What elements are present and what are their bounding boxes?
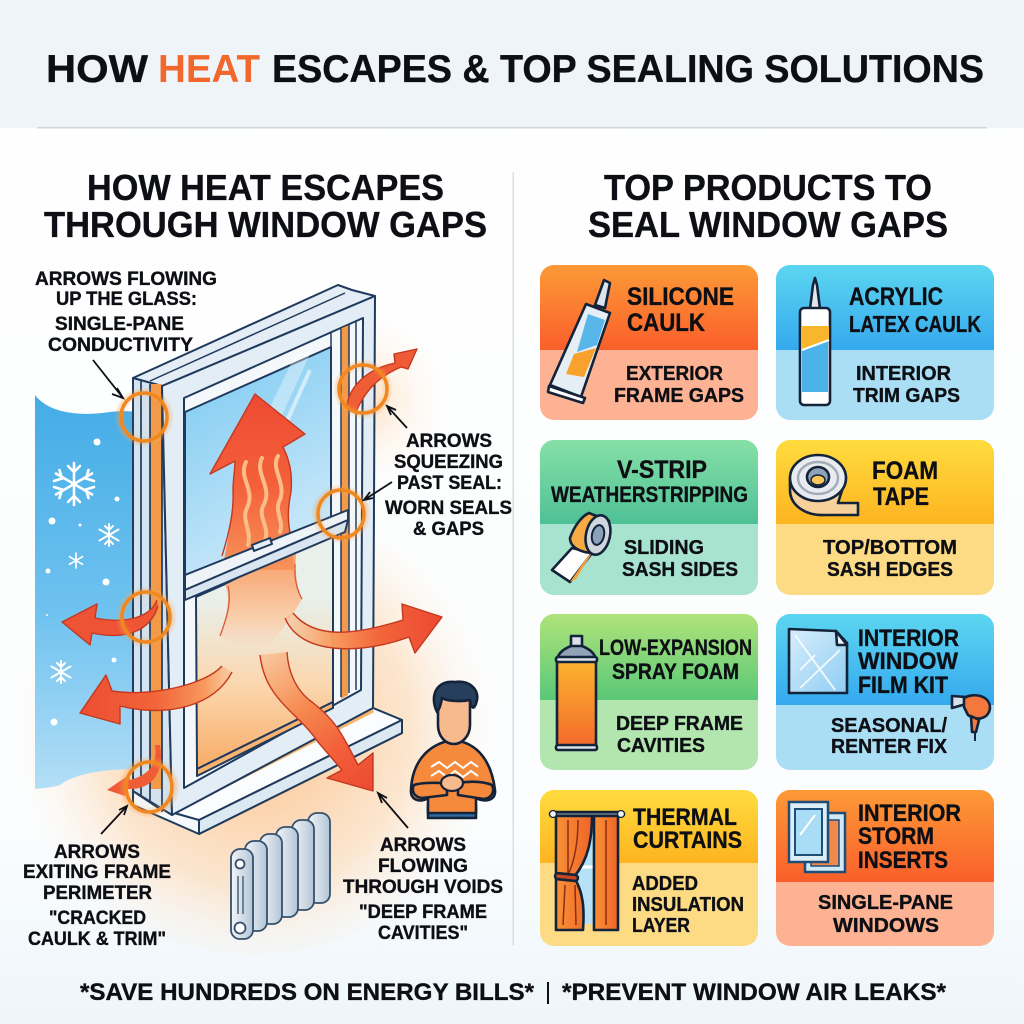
labels: cracked caulk and trim: PERIMETER [43, 883, 152, 904]
right reveal strips [341, 325, 349, 699]
panel: interior window film kit: WINDOW [858, 648, 958, 675]
icon: caulk cartridge [800, 278, 830, 405]
icon: person [411, 682, 495, 818]
pointer arrows [93, 360, 408, 834]
footer tagline [80, 979, 947, 1006]
panel: acrylic latex caulk: LATEX CAULK [849, 311, 981, 337]
footer tagline: *PREVENT WINDOW AIR LEAKS* [562, 979, 947, 1006]
heading: top products: SEAL WINDOW GAPS [588, 204, 948, 245]
title: HEAT [158, 48, 260, 91]
heading: how heat escapes: THROUGH WINDOW GAPS [44, 204, 487, 245]
labels: cracked caulk and trim: "CRACKED [49, 908, 146, 929]
arrow: lower left exit [80, 666, 232, 724]
labels: worn seals and gaps: ARROWS [406, 431, 492, 452]
panel: low-expansion spray foam: LOW-EXPANSION [599, 635, 752, 660]
panel: low-expansion spray foam: DEEP FRAME [616, 713, 743, 735]
panel: v-strip weatherstripping: SLIDING [624, 537, 704, 559]
panel: thermal curtains: LAYER [632, 915, 690, 937]
labels: single-pane conductivity: CONDUCTIVITY [48, 335, 193, 356]
left depth [133, 378, 172, 815]
heading: how heat escapes: HOW HEAT ESCAPES [87, 167, 444, 208]
heading: top products [588, 167, 948, 245]
panel: low-expansion spray foam [540, 614, 758, 770]
panel: acrylic latex caulk [776, 265, 994, 420]
panel: thermal curtains: CURTAINS [633, 827, 742, 854]
labels: cracked caulk and trim: ARROWS [54, 842, 140, 863]
panel: interior window film kit: FILM KIT [858, 672, 948, 699]
labels: cracked caulk and trim: CAULK & TRIM" [28, 929, 166, 950]
icon: radiator [231, 813, 330, 939]
divider [512, 172, 514, 945]
footer tagline: *SAVE HUNDREDS ON ENERGY BILLS* [80, 979, 535, 1006]
icon: hair dryer [952, 695, 990, 741]
title: HOW [46, 48, 148, 91]
leak highlight circles [114, 359, 393, 818]
panel: foam tape: FOAM [872, 457, 938, 485]
icon: plastic film sheet [789, 629, 847, 693]
panel: acrylic latex caulk: TRIM GAPS [853, 385, 960, 407]
heading: how heat escapes [44, 167, 487, 245]
panel: foam tape: SASH EDGES [827, 559, 953, 581]
warm glow [15, 300, 495, 955]
panel: interior storm inserts [776, 790, 994, 946]
meeting rail [185, 510, 348, 600]
panel: silicone caulk: FRAME GAPS [614, 385, 744, 407]
panel: interior storm inserts: STORM [858, 823, 934, 850]
panel: low-expansion spray foam: CAVITIES [617, 735, 705, 757]
panel: acrylic latex caulk: ACRYLIC [849, 283, 943, 311]
labels: deep frame cavities: THROUGH VOIDS [343, 877, 503, 898]
sash lock [252, 538, 272, 551]
arrow: right exit [285, 604, 442, 653]
panel: v-strip weatherstripping: SASH SIDES [622, 559, 738, 581]
panel: interior storm inserts: INSERTS [858, 847, 948, 874]
labels: deep frame cavities: "DEEP FRAME [359, 902, 487, 923]
panel: foam tape: TAPE [873, 483, 929, 511]
panel: interior storm inserts: WINDOWS [833, 915, 939, 937]
top depth [133, 285, 375, 386]
labels: worn seals and gaps: SQUEEZING [394, 452, 503, 473]
labels: deep frame cavities: CAVITIES" [378, 923, 468, 944]
labels: worn seals and gaps: WORN SEALS [385, 498, 512, 519]
panel: interior window film kit: SEASONAL/ [831, 715, 947, 737]
labels: single-pane conductivity: SINGLE-PANE [55, 314, 184, 335]
labels: single-pane conductivity: ARROWS FLOWING [35, 269, 217, 290]
panel: v-strip weatherstripping: V-STRIP [617, 456, 707, 484]
panel: silicone caulk: CAULK [627, 309, 705, 337]
labels: worn seals and gaps: & GAPS [413, 519, 484, 540]
panel: window heat loss diagram [15, 285, 495, 955]
arrow: down through voids [260, 652, 373, 791]
panel: v-strip weatherstripping [540, 440, 758, 595]
arrow: top right exit [347, 349, 417, 412]
icon: caulk tube [548, 280, 610, 403]
panel: interior window film kit: INTERIOR [858, 625, 959, 652]
lower sash glass [196, 536, 333, 769]
panel: v-strip weatherstripping: WEATHERSTRIPPING [551, 482, 748, 507]
icon: spray can [556, 636, 597, 750]
labels: single-pane conductivity [35, 269, 217, 356]
panel: silicone caulk: EXTERIOR [626, 363, 724, 385]
icon: curtains [550, 810, 624, 930]
panel: silicone caulk [540, 265, 758, 420]
panel: acrylic latex caulk: INTERIOR [856, 363, 952, 385]
title: ESCAPES & TOP SEALING SOLUTIONS [272, 48, 984, 91]
panel: interior storm inserts: SINGLE-PANE [818, 892, 953, 914]
panel: foam tape [776, 440, 994, 595]
snowflakes and snow dots [46, 438, 120, 726]
labels: deep frame cavities: FLOWING [378, 856, 468, 877]
panel: thermal curtains [540, 790, 758, 946]
panel: interior window film kit: RENTER FIX [831, 736, 948, 758]
labels: deep frame cavities [343, 835, 503, 944]
heading: top products: TOP PRODUCTS TO [604, 167, 932, 208]
icon: v-strip roll [552, 513, 614, 582]
icon: foam tape roll [790, 455, 858, 515]
arrow: mid left exit [62, 600, 158, 645]
panel: interior window film kit [776, 614, 994, 770]
icon: storm insert frames [789, 802, 845, 872]
panel: thermal curtains: ADDED [632, 873, 698, 895]
labels: worn seals and gaps: PAST SEAL: [397, 473, 502, 494]
cold outdoor panel [35, 395, 150, 789]
panel: silicone caulk: SILICONE [627, 283, 734, 311]
window frame [133, 285, 402, 834]
header band [0, 0, 1024, 128]
labels: cracked caulk and trim [23, 842, 171, 950]
labels: worn seals and gaps [385, 431, 512, 540]
upper sash glass [185, 347, 331, 575]
labels: deep frame cavities: ARROWS [380, 835, 466, 856]
arrow: up the glass [210, 394, 305, 652]
panel: foam tape: TOP/BOTTOM [823, 537, 957, 559]
panel: thermal curtains: INSULATION [632, 894, 744, 916]
panel: interior storm inserts: INTERIOR [858, 800, 961, 827]
sill [133, 708, 402, 834]
front frame [162, 296, 375, 815]
arrow: frame perimeter exit [107, 745, 161, 796]
panel: low-expansion spray foam: SPRAY FOAM [612, 659, 739, 684]
labels: cracked caulk and trim: EXITING FRAME [23, 862, 171, 883]
labels: single-pane conductivity: UP THE GLASS: [56, 289, 197, 310]
panel: thermal curtains: THERMAL [633, 804, 737, 831]
